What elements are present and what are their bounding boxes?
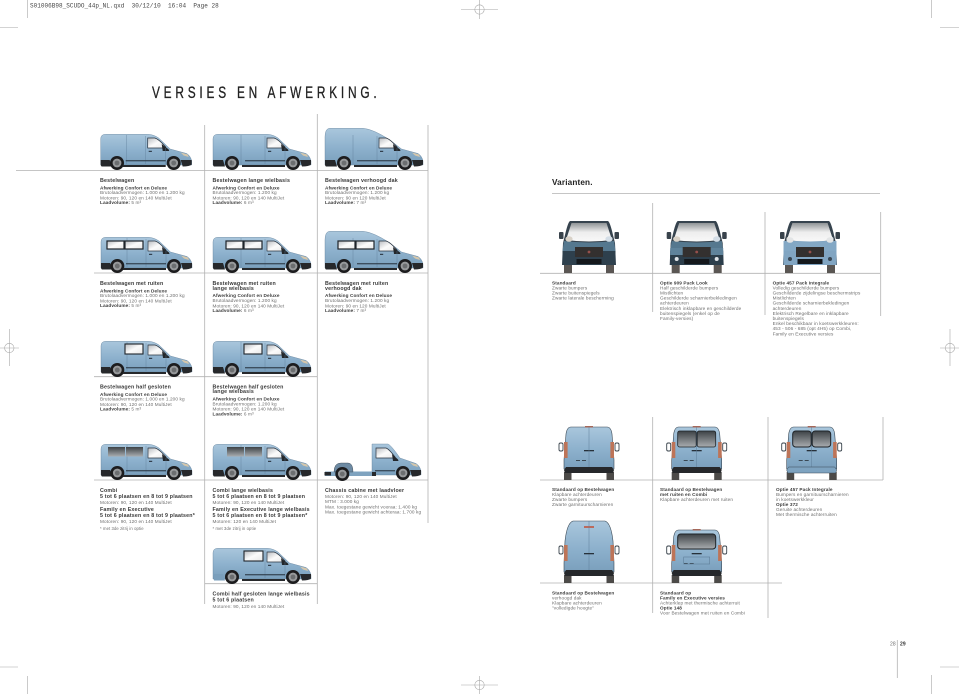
caption: Motoren: 90, 120 en 140 MultiJet	[212, 304, 285, 308]
caption: Motoren: 90, 120 en 140 MultiJet	[100, 500, 172, 505]
caption: achterdeuren	[773, 306, 802, 311]
caption: verhoogd dak	[325, 286, 362, 292]
heading: Varianten: Varianten.	[552, 178, 593, 187]
caption: Achterklep met thermische achterruit	[660, 600, 741, 606]
variant: Bestelwagen lange wielbasis	[212, 134, 311, 205]
caption: Optie 457 Pack Integrale	[776, 487, 833, 492]
caption: Zwarte bumpers	[552, 286, 588, 290]
variant: Bestelwagen half gesloten lange wielbasis	[212, 341, 311, 416]
variant: Bestelwagen met ruiten verhoogd dak	[325, 231, 423, 313]
caption: Max. toegestane gewicht vooraa: 1.400 kg	[325, 504, 417, 510]
caption: Family-versies)	[660, 316, 694, 321]
caption: Brutolaadvermogen: 1.000 en 1.200 kg	[100, 396, 185, 401]
caption: Mistlichten	[660, 290, 684, 296]
caption: Bestelwagen met ruiten	[325, 281, 388, 287]
caption: Standaard	[552, 280, 576, 286]
caption: Laadvolume: 6 m³	[212, 308, 254, 313]
caption: Brutolaadvermogen: 1.000 en 1.200 kg	[100, 190, 185, 195]
caption: verhoogd dak	[552, 596, 582, 600]
caption	[100, 281, 185, 308]
caption: 5 tot 6 plaatsen en 8 tot 9 plaatsen	[212, 494, 305, 500]
caption	[212, 592, 310, 609]
caption	[212, 281, 285, 313]
caption: Afwerking Confort en Deluxe	[325, 186, 392, 190]
caption: Voor Bestelwagen met ruiten en Combi	[660, 610, 745, 616]
caption	[100, 178, 185, 205]
caption: buitenspiegels	[773, 316, 805, 321]
van image	[325, 128, 423, 170]
caption: Chassis cabine met laadvloer	[325, 488, 404, 494]
caption	[325, 178, 398, 205]
variant: Chassis cabine met laadvloer	[324, 444, 421, 514]
variant: Bestelwagen	[100, 134, 192, 205]
caption: Standaard op Bestelwagen	[660, 487, 722, 492]
van image	[213, 444, 311, 480]
option: 457 Pack Integrale	[773, 221, 861, 336]
caption: 5 tot 6 plaatsen en 8 tot 9 plaatsen	[100, 494, 193, 500]
caption: * met 3de zitrij in optie	[100, 526, 144, 531]
caption: Brutolaadvermogen: 1.200 kg	[212, 190, 277, 195]
caption	[325, 281, 392, 313]
caption: Bestelwagen half gesloten	[100, 384, 171, 390]
caption	[212, 178, 290, 205]
caption: Enkel beschikbaar in koetswerkkleuren:	[773, 321, 859, 326]
caption: Geruite achterdeuren	[776, 507, 823, 512]
caption: Motoren: 90 en 120 MultiJet	[325, 196, 386, 200]
caption: Laadvolume: 5 m³	[100, 200, 142, 205]
caption: Family en Executive versies	[660, 596, 725, 600]
caption: Motoren: 90, 120 en 140 MultiJet	[100, 298, 172, 304]
option: tailgate rear	[660, 529, 745, 616]
caption	[660, 280, 742, 321]
caption: Family en Executive lange wielbasis	[212, 507, 310, 513]
caption: Laadvolume: 7 m³	[325, 200, 367, 205]
caption: lange wielbasis	[212, 286, 254, 292]
option: 909 Pack Look	[660, 221, 742, 321]
caption: Motoren: 90, 120 en 140 MultiJet	[212, 407, 285, 412]
caption: Afwerking Confort en Deluxe	[212, 397, 280, 402]
rear view image	[667, 426, 727, 480]
page numbers: 28	[890, 642, 896, 648]
caption: Combi half gesloten lange wielbasis	[212, 592, 310, 598]
caption: Motoren: 90, 120 en 140 MultiJet	[100, 519, 172, 524]
caption: Afwerking Confort en Deluxe	[100, 186, 167, 190]
caption: met ruiten en Combi	[660, 492, 707, 497]
caption: Zwarte bumpers	[552, 497, 588, 502]
variant: Bestelwagen verhoogd dak	[325, 128, 423, 205]
caption: Afwerking Confort en Deluxe	[100, 392, 167, 397]
caption: Bestelwagen met ruiten	[100, 281, 163, 287]
caption: Combi	[100, 488, 118, 494]
front view image	[559, 221, 619, 273]
caption: Brutolaadvermogen: 1.200 kg	[325, 190, 389, 195]
caption: Motoren: 90, 120 en 140 MultiJet	[325, 494, 397, 499]
caption: Afwerking Confort en Deluxe	[100, 288, 167, 294]
van image	[213, 237, 311, 273]
variant: Bestelwagen half gesloten	[100, 341, 192, 412]
variant: Combi lange wielbasis	[212, 444, 311, 531]
caption: * met 3de zitrij in optie	[212, 526, 257, 531]
caption: Zwarte buitenspiegels	[552, 290, 600, 296]
caption: Geschilderde zijdelingse beschermstrips	[773, 290, 861, 296]
caption	[773, 280, 861, 336]
option: Standaard rear	[552, 426, 619, 507]
caption: Bestelwagen half gesloten	[212, 384, 284, 390]
caption: 453 - 506 - 685 (opt 4H5) op Combi,	[773, 326, 851, 331]
caption: Laadvolume: 5 m³	[100, 303, 142, 308]
caption: Bestelwagen	[100, 178, 134, 184]
caption: Klapbare achterdeuren	[552, 600, 602, 606]
caption: Geschilderde scharnierbekledingen	[660, 296, 737, 300]
caption: Max. toegestane gewicht achteraa: 1.700 kg	[325, 510, 421, 514]
option: 457 rear	[776, 426, 849, 517]
caption: Standaard op Bestelwagen	[552, 487, 614, 492]
variant: Bestelwagen met ruiten lange wielbasis	[212, 237, 311, 313]
caption: "volledigde hoogte"	[552, 606, 594, 610]
van image	[101, 134, 192, 170]
rear view image	[782, 426, 842, 480]
page numbers: 29	[900, 642, 906, 648]
caption: Motoren: 90, 120 en 140 MultiJet	[212, 604, 285, 609]
caption	[660, 487, 733, 502]
van image	[101, 341, 192, 377]
caption: Afwerking Confort en Deluxe	[212, 293, 280, 298]
caption: Bestelwagen met ruiten	[212, 281, 276, 287]
title: VERSIES EN AFWERKING.	[152, 84, 377, 103]
caption: Motoren: 90, 120 en 140 MultiJet	[100, 196, 172, 200]
caption: Motoren: 90, 120 en 140 MultiJet	[100, 402, 172, 407]
caption: Laadvolume: 5 m³	[100, 407, 142, 412]
caption: Bestelwagen lange wielbasis	[212, 178, 290, 184]
rear view image	[667, 529, 727, 583]
caption: MTM : 3.000 kg	[325, 499, 359, 504]
caption: in koetswerkkleur	[776, 497, 814, 502]
caption: Half geschilderde bumpers	[660, 286, 719, 290]
caption: Laadvolume: 7 m³	[325, 308, 367, 313]
van image	[325, 231, 423, 273]
variant: Combi half gesloten lange wielbasis	[212, 548, 311, 609]
caption: Zwarte laterale bescherming	[552, 296, 614, 300]
caption	[212, 384, 285, 416]
caption	[100, 488, 196, 531]
caption: 5 tot 6 plaatsen	[212, 598, 254, 604]
caption: Brutolaadvermogen: 1.200 kg	[325, 298, 389, 303]
caption	[552, 487, 614, 507]
caption: Zwarte garnituurscharnieren	[552, 502, 614, 507]
option: high roof rear	[552, 521, 619, 610]
caption: Optie 457 Pack Integrale	[773, 280, 829, 286]
caption	[100, 384, 185, 412]
caption: Brutolaadvermogen: 1.000 en 1.200 kg	[100, 293, 185, 298]
caption: Combi lange wielbasis	[212, 488, 273, 494]
van image	[213, 134, 311, 170]
caption: Met thermische achterruiten	[776, 512, 837, 517]
van image	[101, 237, 192, 273]
caption: Motoren: 90, 120 en 140 MultiJet	[212, 500, 285, 505]
caption: Klapbare achterdeuren met ruiten	[660, 497, 733, 502]
caption: Optie 909 Pack Look	[660, 280, 708, 286]
caption: Family en Executive	[100, 507, 154, 513]
caption: Afwerking Confort en Deluxe	[325, 293, 392, 298]
caption: Laadvolume: 6 m³	[212, 200, 254, 205]
van image	[213, 548, 311, 584]
variant: Combi	[100, 444, 196, 531]
caption: Volledig geschilderde bumpers	[773, 286, 840, 290]
caption: Brutolaadvermogen: 1.200 kg	[212, 298, 277, 303]
caption: Motoren: 120 en 140 MultiJet	[212, 519, 277, 524]
caption: 5 tot 6 plaatsen en 8 tot 9 plaatsen*	[100, 513, 196, 519]
option: rear with windows	[660, 426, 733, 502]
caption	[552, 280, 614, 300]
caption: Standaard op Bestelwagen	[552, 590, 614, 596]
caption: Bestelwagen verhoogd dak	[325, 178, 398, 184]
caption: Standaard op	[660, 590, 691, 596]
caption: Afwerking Confort en Deluxe	[212, 186, 280, 190]
caption	[552, 590, 614, 610]
caption: Elektrisch inklapbare en geschilderde	[660, 306, 742, 311]
caption: Motoren: 90, 120 en 140 MultiJet	[212, 196, 285, 200]
chassis cab image	[324, 444, 421, 481]
caption: Elektrisch Regelbare en inklapbare	[773, 311, 849, 316]
caption: Brutolaadvermogen: 1.200 kg	[212, 401, 277, 406]
caption	[776, 487, 849, 517]
van image	[101, 444, 192, 480]
van image	[213, 341, 311, 377]
page numbers	[890, 640, 906, 678]
caption: Klapbare achterdeuren	[552, 492, 602, 497]
caption: Motoren: 90 en 120 MultiJet	[325, 304, 386, 308]
caption	[212, 488, 310, 531]
caption: buitenspiegels (enkel op de	[660, 311, 720, 316]
option: Standaard front	[552, 221, 619, 300]
caption	[660, 590, 745, 616]
caption: Laadvolume: 6 m³	[212, 411, 254, 416]
caption: 5 tot 6 plaatsen en 8 tot 9 plaatsen*	[212, 513, 308, 519]
variant: Bestelwagen met ruiten	[100, 237, 192, 308]
print slug header: S01006B98_SCUDO_44p_NL.qxd 30/12/10 16:04 Page 28	[30, 2, 219, 10]
grid lines	[16, 114, 883, 618]
front view image	[780, 221, 840, 273]
caption: Family en Executive versies	[773, 331, 834, 336]
caption: achterdeuren	[660, 301, 689, 306]
rear view image	[559, 426, 619, 480]
caption: Mistlichten	[773, 296, 796, 301]
front view image	[667, 221, 727, 273]
caption: Optie 372	[776, 502, 798, 507]
caption: Geschilderde scharnierbekledingen	[773, 301, 850, 306]
caption: Bumpers en garnituurscharnieren	[776, 492, 849, 497]
caption	[325, 488, 421, 514]
caption: lange wielbasis	[212, 389, 254, 395]
caption: Optie 148	[660, 606, 682, 610]
rear view image	[559, 521, 619, 583]
